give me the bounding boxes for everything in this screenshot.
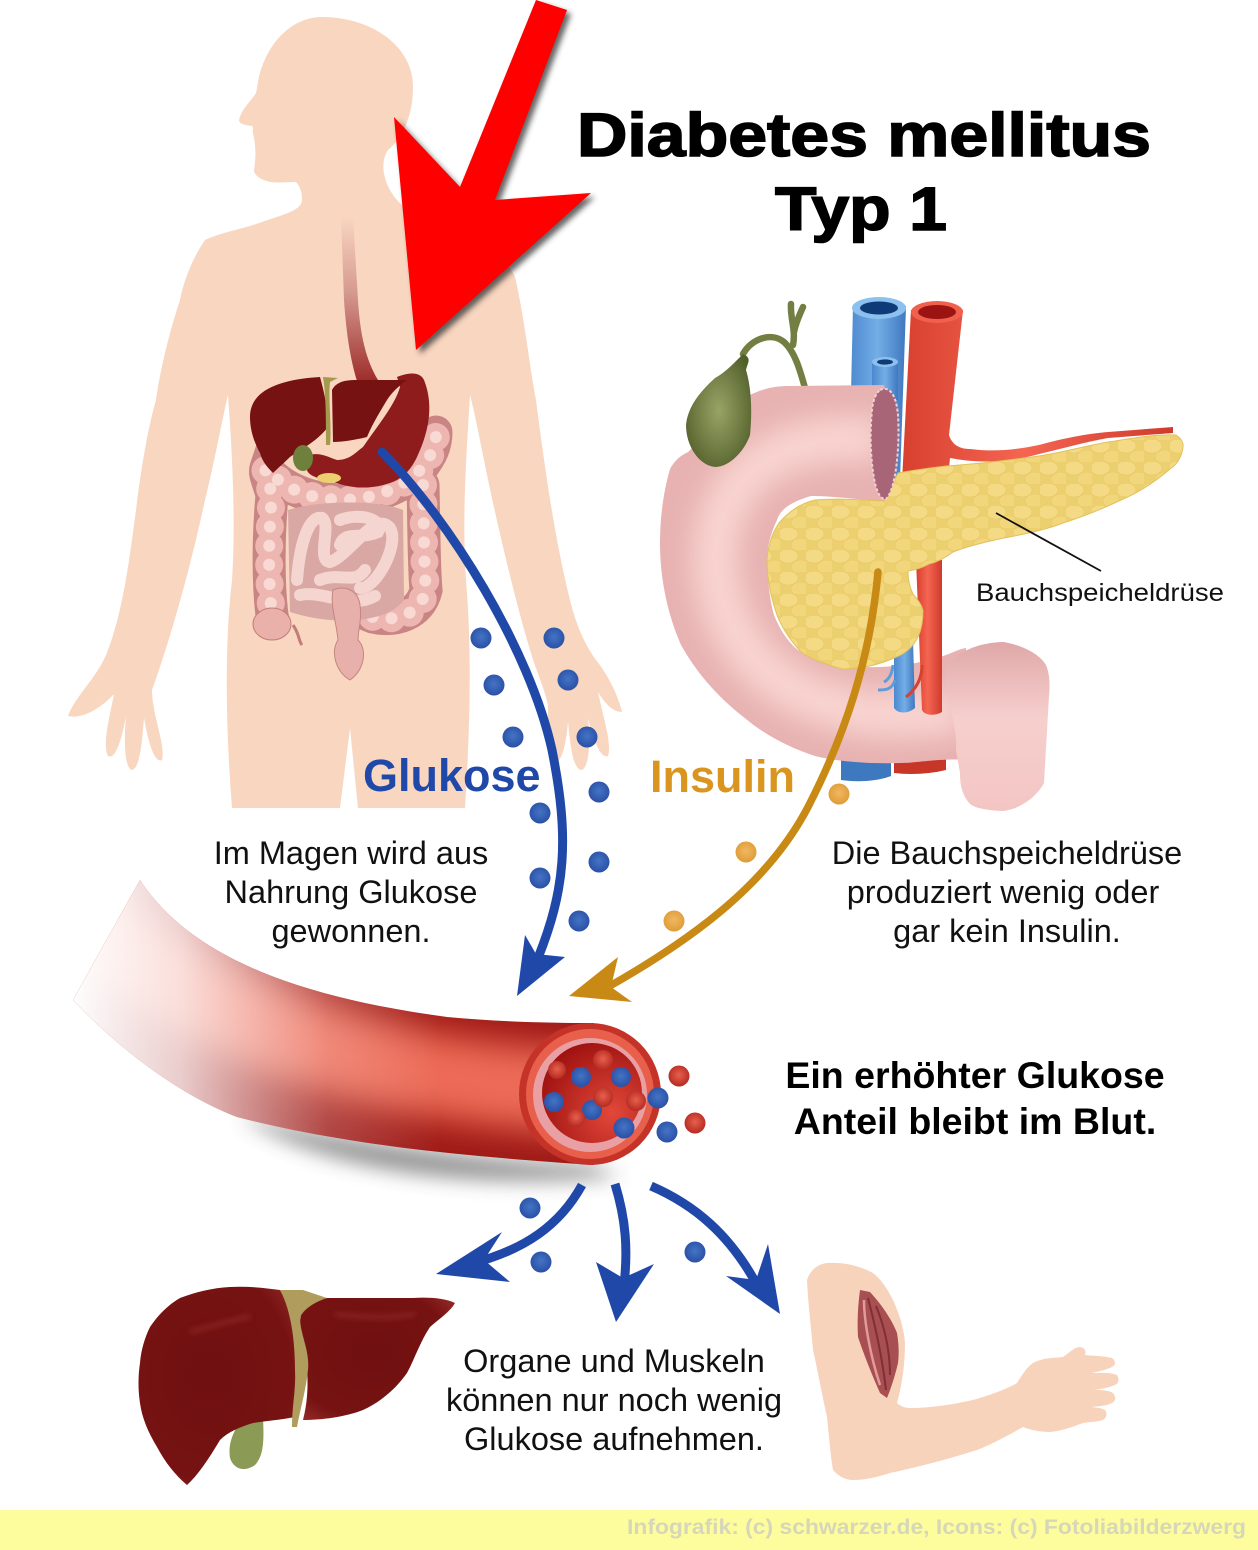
title: Typ 1 [775, 175, 947, 243]
blood vessel [60, 870, 706, 1180]
left lobe [138, 1287, 296, 1485]
text: stomach: Nahrung Glukose [225, 874, 477, 910]
footer bar [0, 1510, 1258, 1550]
blue vein [841, 297, 906, 781]
right lobe [300, 1298, 455, 1420]
vessel tube [73, 880, 594, 1165]
glucose dots below vessel [520, 1198, 706, 1272]
human body silhouette [68, 17, 622, 808]
cecum [253, 608, 291, 640]
text: pancreas: Die Bauchspeicheldrüse [832, 835, 1182, 871]
pancreas in abdomen [317, 473, 341, 483]
glucose arrow [382, 452, 565, 996]
ligament [323, 377, 338, 445]
icon: esophagus and digestive organs [250, 217, 436, 680]
gallbladder [686, 354, 751, 467]
large intestine [265, 432, 436, 622]
gallbladder duct [743, 304, 805, 388]
text: organs and muscles: können nur noch wenig [446, 1382, 782, 1418]
cut opening of duodenum [871, 389, 898, 499]
lower vessel segments [878, 560, 942, 715]
gallbladder [229, 1418, 263, 1469]
text: stomach: gewonnen. [271, 913, 431, 949]
duodenum end cap [946, 642, 1050, 811]
text: elevated glucose: Ein erhöhter Glukose [785, 1054, 1165, 1096]
liver right lobe [332, 380, 407, 442]
insulin dots [664, 784, 850, 932]
ligament [280, 1290, 327, 1427]
text: organs and muscles: Glukose aufnehmen. [464, 1421, 764, 1457]
liver left lobe [250, 377, 328, 473]
muscle [858, 1290, 899, 1398]
insulin arrow [569, 572, 878, 1002]
appendix [293, 625, 302, 645]
pancreas gland [767, 435, 1183, 669]
glucose dots [470, 628, 610, 932]
title: Diabetes mellitus [577, 101, 1151, 169]
label: Bauchspeicheldrüse: Bauchspeicheldrüse [976, 579, 1224, 607]
duodenum [660, 385, 975, 763]
text: pancreas: produziert wenig oder [847, 874, 1159, 910]
label: Insulin: Insulin [650, 751, 795, 802]
icon: liver [138, 1287, 455, 1485]
text: pancreas: gar kein Insulin. [893, 913, 1121, 949]
pancreas pointer [996, 513, 1101, 571]
esophagus [341, 217, 378, 384]
liver highlights [190, 1314, 415, 1332]
label: Glukose: Glukose [363, 750, 541, 801]
rectum [332, 588, 364, 680]
illustration: pancreas with duodenum, gallbladder and vessels [660, 297, 1183, 811]
vessel shadow [240, 1115, 620, 1180]
icon: arm with muscle [807, 1263, 1118, 1480]
stomach [306, 374, 429, 488]
credit: Infografik: (c) schwarzer.de, Icons: (c) Fotoliabilderzwerg [627, 1516, 1246, 1539]
vessel opening [519, 1023, 661, 1165]
red arrow [394, 0, 595, 354]
blood cells [544, 1050, 706, 1142]
text: stomach: Im Magen wird aus [214, 835, 488, 871]
three blue arrows [436, 1184, 780, 1322]
text: elevated glucose: Anteil bleibt im Blut. [794, 1100, 1156, 1142]
red artery [894, 301, 1173, 774]
text: organs and muscles: Organe und Muskeln [463, 1343, 765, 1379]
gallbladder [293, 445, 313, 471]
small intestine [288, 502, 404, 621]
